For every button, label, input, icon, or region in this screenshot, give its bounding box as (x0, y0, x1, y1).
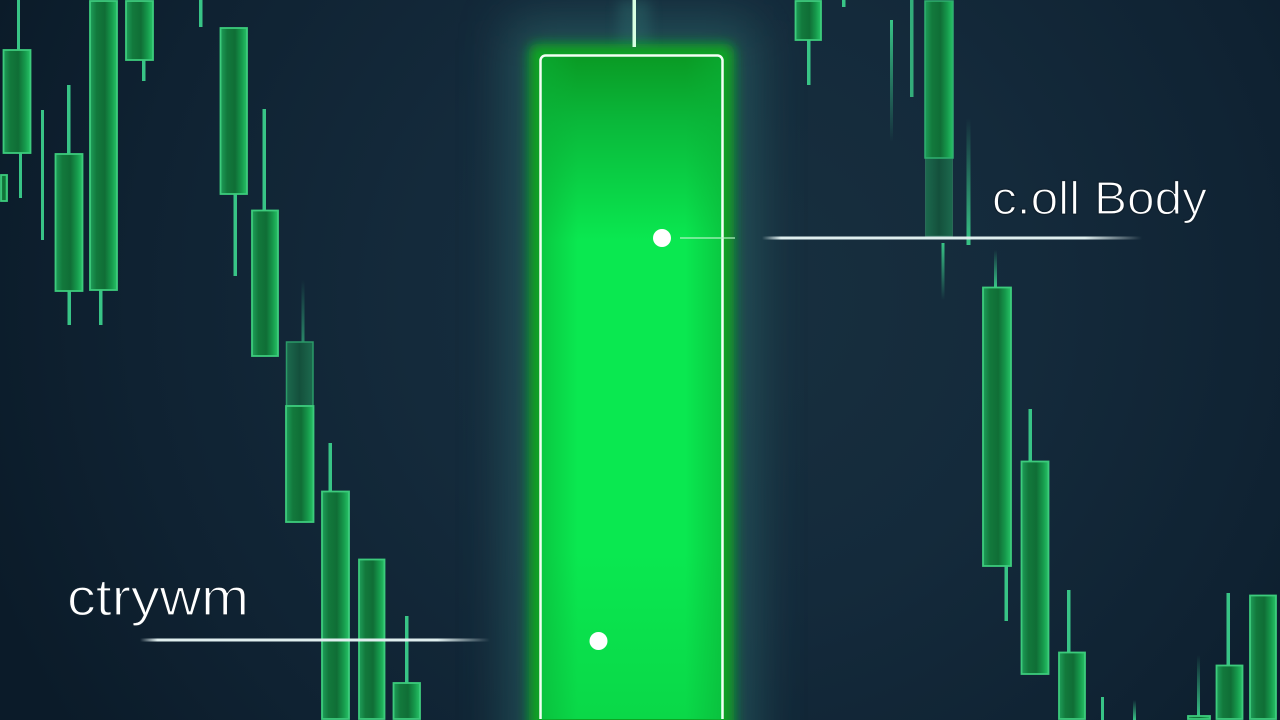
loose wick (41, 110, 44, 240)
candle 15 (1022, 409, 1048, 674)
wick halo (618, 0, 650, 50)
long wick (910, 0, 914, 97)
candle 8 two tone (286, 280, 314, 522)
fading wick under line (942, 243, 944, 300)
lower leader line (140, 638, 490, 642)
teal halo (508, 20, 755, 720)
candle 9 (322, 443, 349, 719)
top wick (842, 0, 846, 7)
green glow band (529, 44, 734, 720)
candle 16 (1059, 590, 1085, 719)
lower dot (590, 632, 608, 650)
upper dot (653, 229, 671, 247)
lower label: ctrywm (67, 569, 249, 627)
candle body (540, 56, 722, 720)
main candle glow (508, 0, 755, 720)
main candle (529, 0, 734, 720)
candle 5 (126, 1, 153, 81)
candle 6 (220, 28, 247, 276)
fading wick (890, 20, 893, 142)
upper leader line (762, 236, 1142, 240)
candle 14 (983, 250, 1011, 621)
top wick (199, 0, 202, 27)
candle 11 (394, 616, 420, 719)
candle 3 (56, 85, 82, 325)
candle 19 (1250, 596, 1276, 719)
bottom wicks (1101, 697, 1136, 720)
upper callout (653, 172, 1207, 247)
candle 18 (1216, 593, 1242, 719)
candle 2 clipped at edge (1, 175, 7, 201)
candle 7 (252, 109, 278, 356)
upper label: c.oll Body (992, 172, 1207, 224)
candle 12 (796, 1, 821, 85)
right candles (796, 0, 1276, 720)
left candles (1, 0, 420, 719)
candle 17 (1188, 655, 1210, 719)
candle 10 (359, 560, 384, 719)
lower callout (67, 569, 608, 650)
candle 13 two tone (925, 1, 953, 236)
faint leader (680, 237, 735, 239)
upper wick (632, 0, 636, 47)
candle 4 (90, 1, 117, 325)
candle 1 (4, 0, 30, 198)
wick over line (966, 118, 970, 245)
